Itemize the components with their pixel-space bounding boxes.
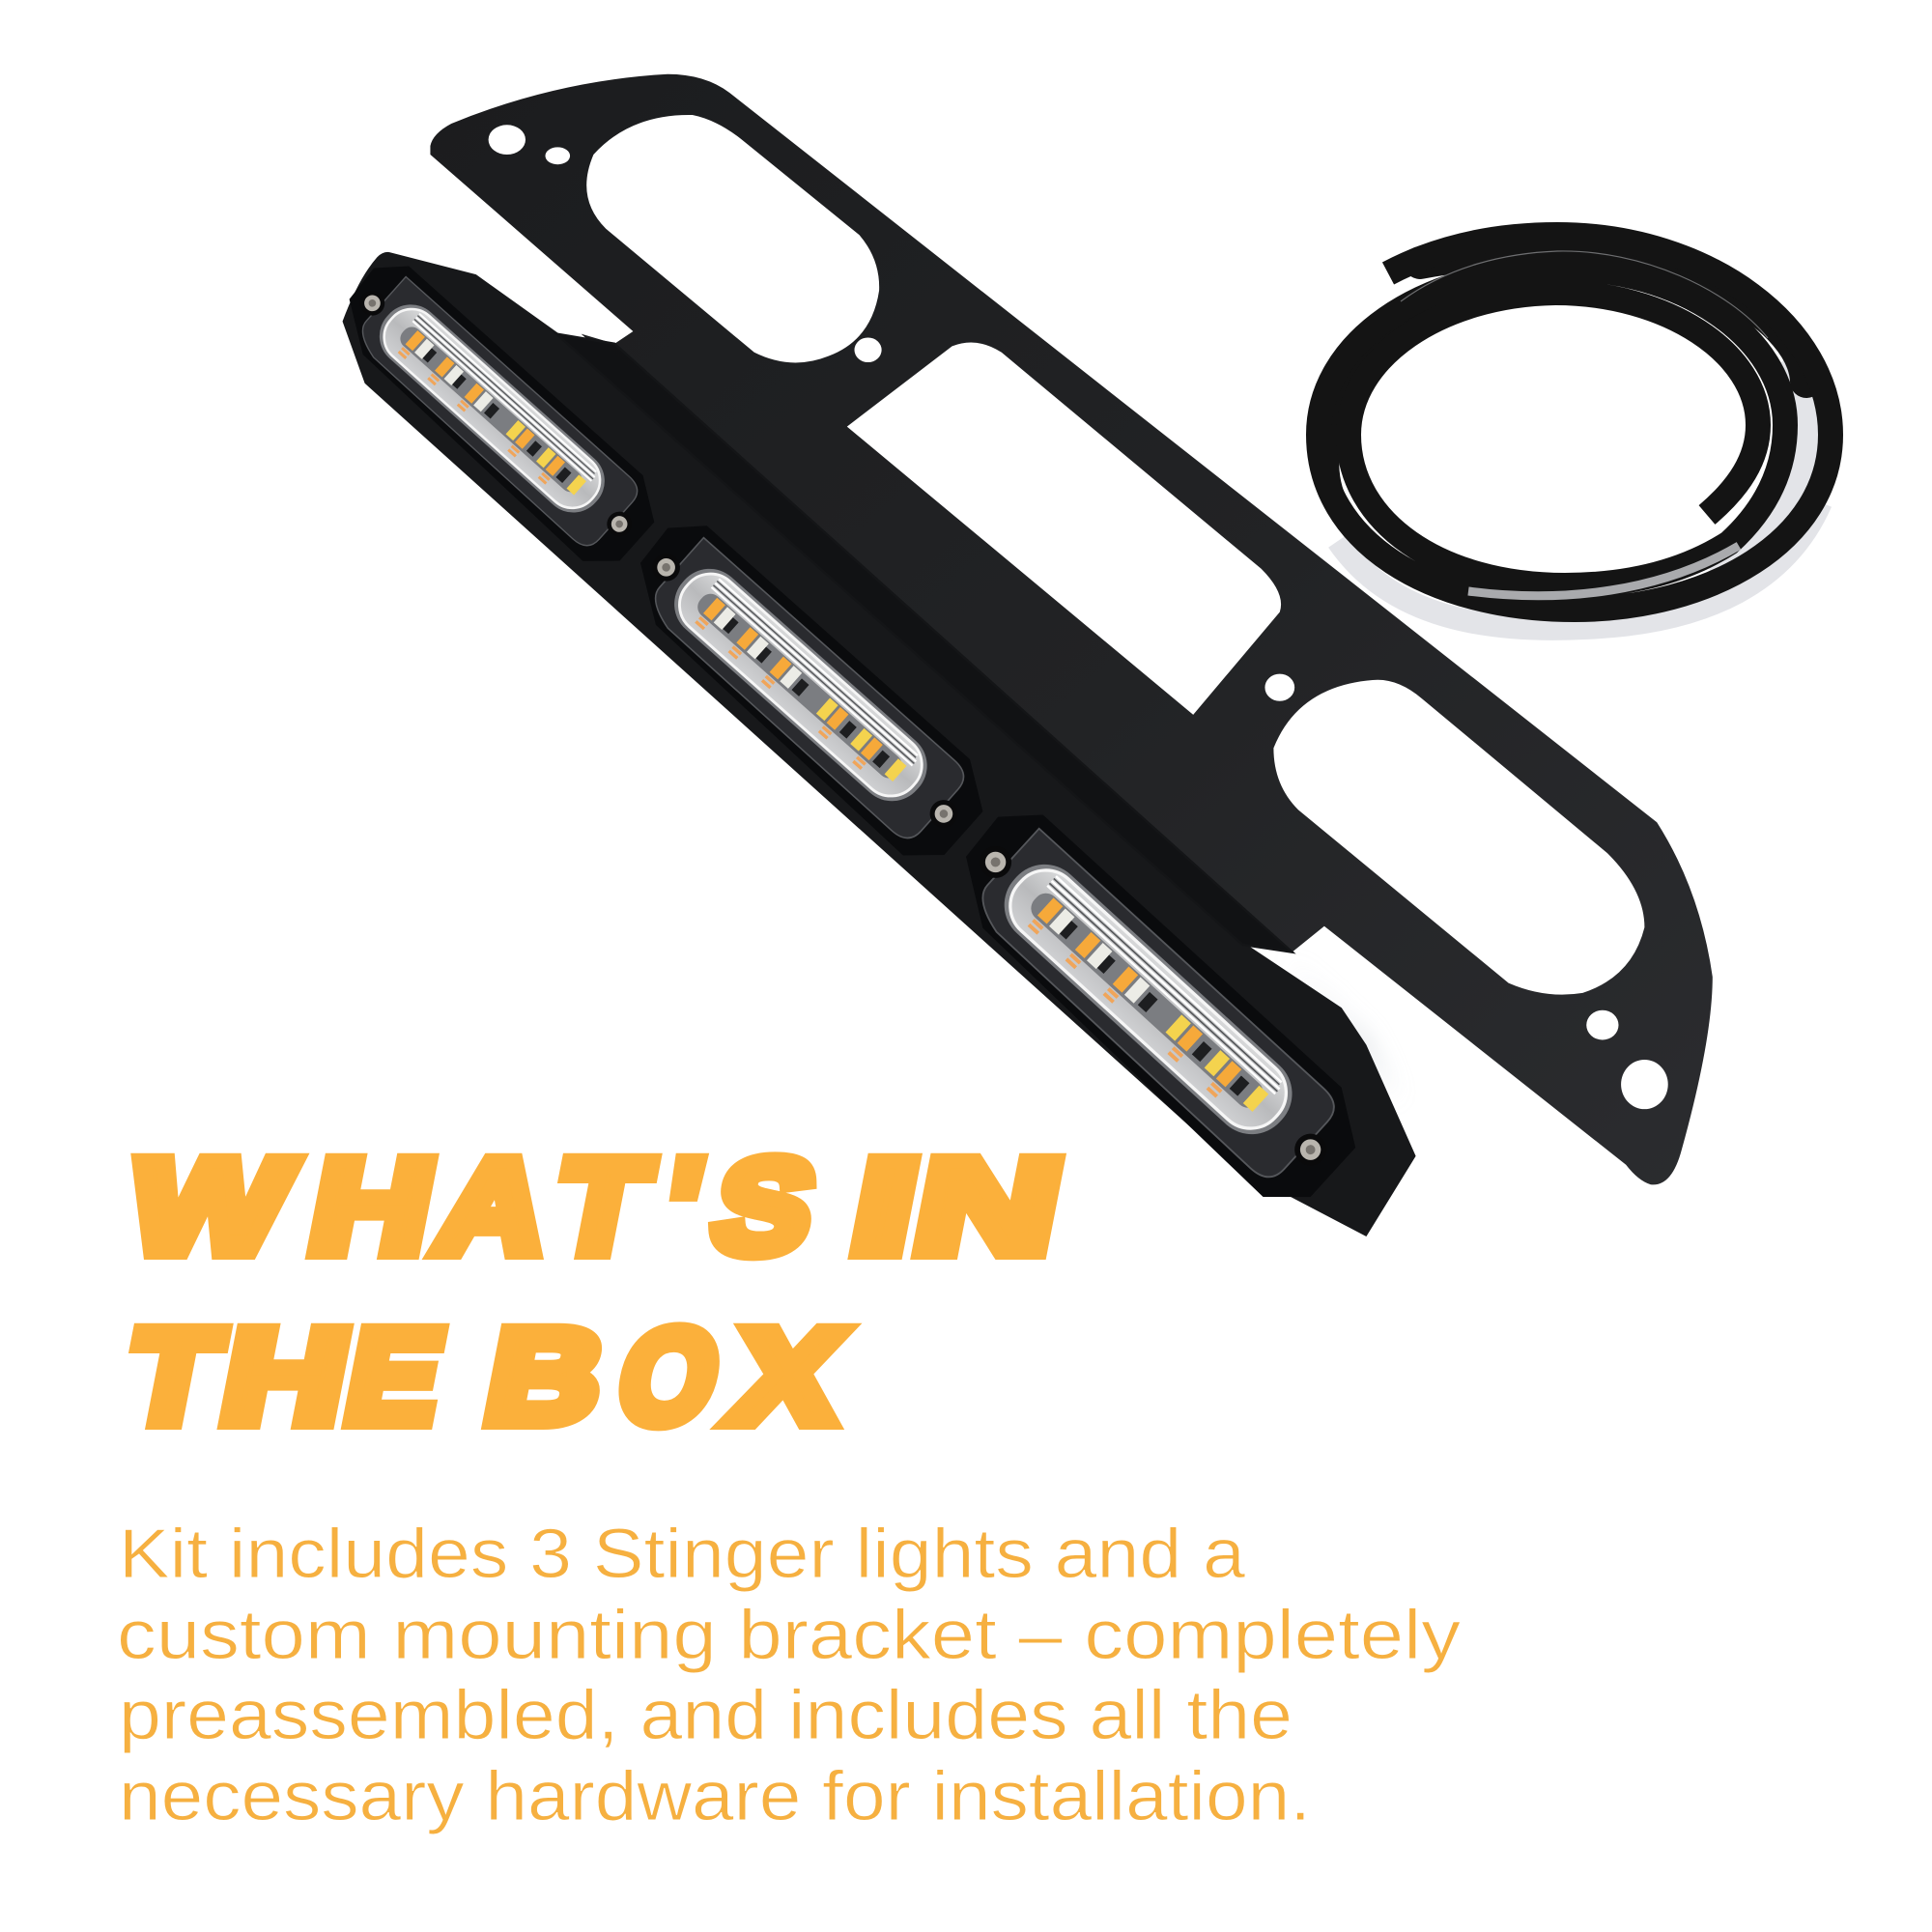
- description text: Kit includes 3 Stinger lights and a: [119, 1516, 1246, 1593]
- front plate: [343, 252, 1416, 1236]
- light 2: [609, 507, 1003, 875]
- soft shadow: [1286, 958, 1397, 1100]
- bracket bend: [556, 334, 1293, 952]
- heading: T: [545, 1133, 660, 1281]
- heading: X: [721, 1303, 854, 1451]
- heading: T: [116, 1303, 231, 1451]
- heading: S: [702, 1133, 826, 1281]
- light 1: [321, 249, 672, 580]
- upper bracket plate: [430, 74, 1713, 1184]
- heading: H: [212, 1303, 359, 1451]
- foam seal ring: [1319, 235, 1831, 629]
- heading: H: [299, 1133, 444, 1281]
- light 3: [929, 793, 1379, 1220]
- heading: ': [652, 1133, 712, 1281]
- heading: O: [608, 1303, 730, 1451]
- mounting bracket and lights: [321, 74, 1713, 1236]
- description text: custom mounting bracket – completely: [117, 1597, 1461, 1674]
- heading: I: [841, 1133, 928, 1281]
- heading: A: [426, 1133, 560, 1281]
- foam shadow fill: [1420, 251, 1806, 382]
- heading: N: [904, 1133, 1072, 1281]
- foam spiral: [1319, 235, 1831, 610]
- heading: E: [335, 1303, 454, 1451]
- description text: [117, 1516, 1461, 1835]
- foam backing strip: [1338, 357, 1821, 629]
- description text: preassembled, and includes all the: [119, 1677, 1293, 1754]
- heading: W: [118, 1133, 301, 1281]
- foam inner shadow fill: [1332, 280, 1555, 497]
- heading: B: [475, 1303, 615, 1451]
- foam spiral gap lines: [1401, 251, 1768, 338]
- description text: necessary hardware for installation.: [119, 1758, 1311, 1835]
- foam grey liner: [1468, 546, 1739, 596]
- heading: [116, 1133, 1072, 1451]
